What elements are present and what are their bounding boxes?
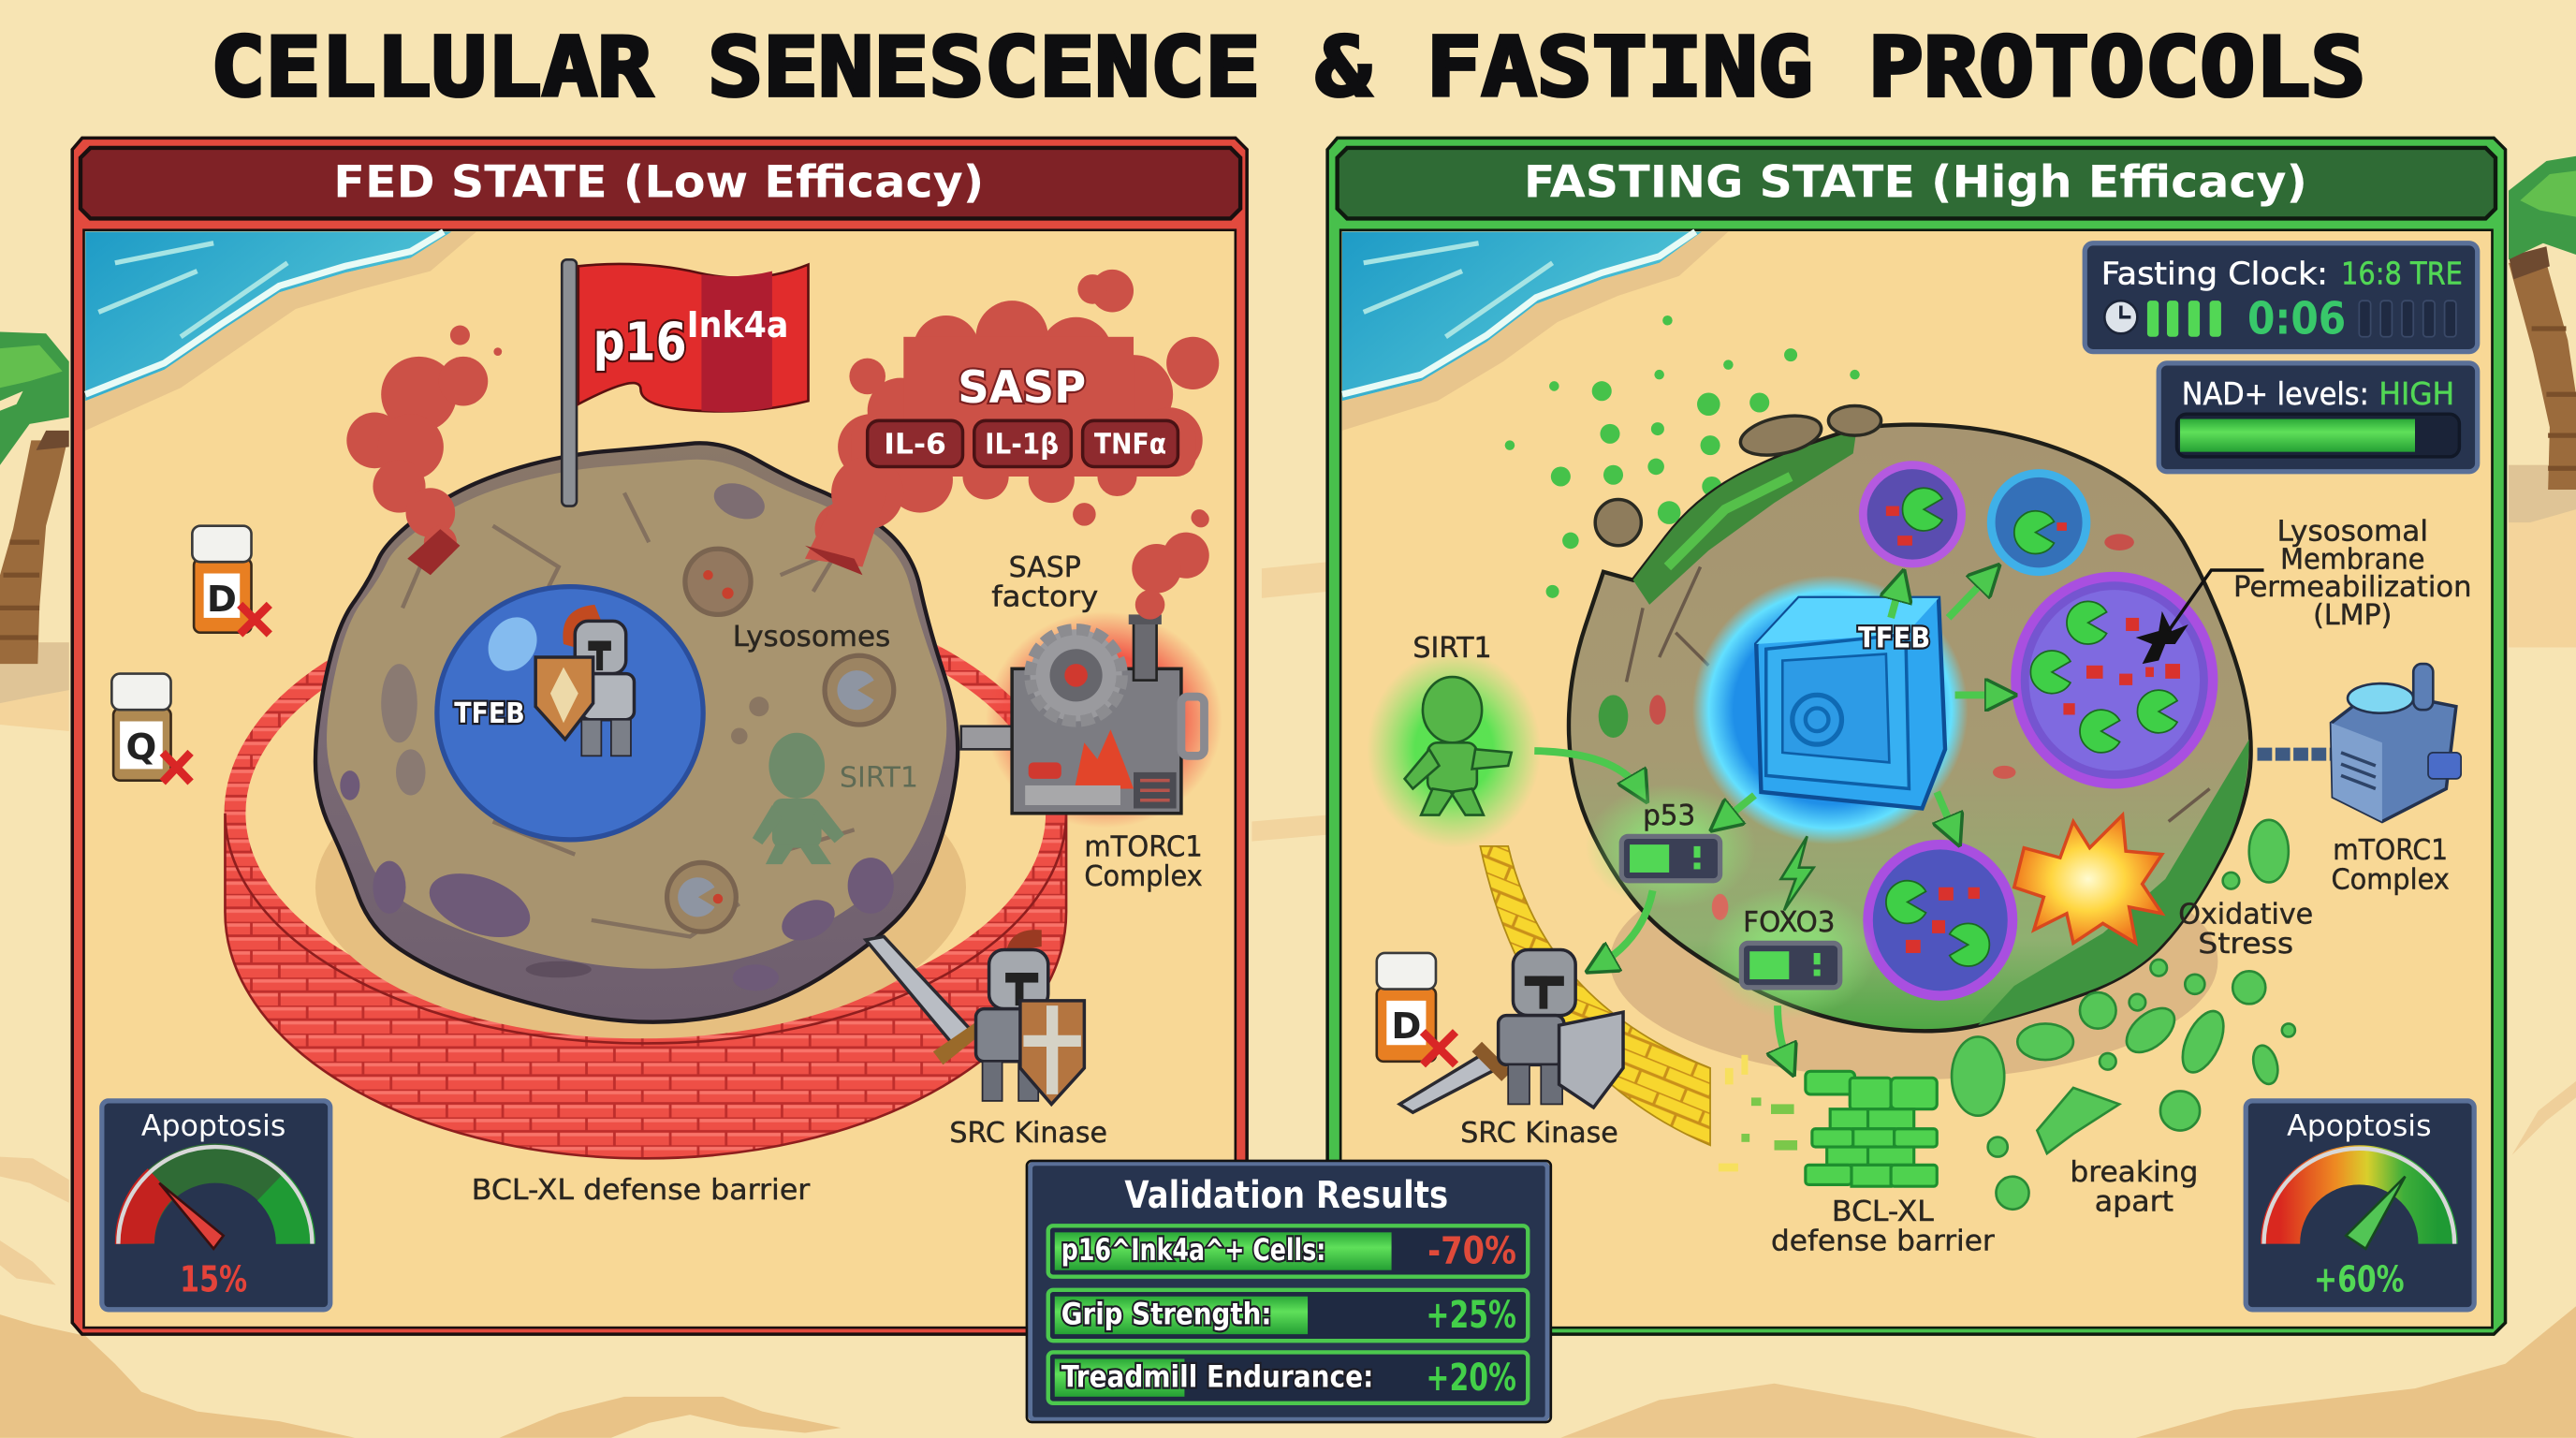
label: p53: p53	[1643, 800, 1695, 832]
figure: dormant SIRT1	[753, 733, 844, 864]
pill bottle: D crossed fasting	[1377, 953, 1456, 1064]
senescent cell	[315, 443, 958, 1022]
label: SIRT1 dim: SIRT1	[840, 762, 918, 795]
row: p16 cells: -70%	[1427, 1229, 1516, 1273]
fasting clock panel: 16:8 TRE	[2341, 256, 2463, 292]
label: mTORC1 Complex: mTORC1	[1084, 830, 1203, 863]
nucleus with TFEB knight	[437, 587, 703, 840]
label: mTORC1 Complex fasting: mTORC1	[2333, 834, 2448, 867]
label: BCL-XL defense barrier fasting: defense barrier	[1771, 1225, 1995, 1258]
header: fasting state: FASTING STATE (High Efficacy)	[1524, 157, 2307, 209]
pill bottle: D crossed	[192, 526, 270, 634]
label: TFEB in fasting: TFEB	[1858, 623, 1930, 655]
pill bottle: Q crossed: Q	[126, 726, 156, 769]
lysosome: dim pac	[825, 655, 894, 725]
green wall fragments	[1952, 820, 2295, 1210]
fasting clock panel	[2085, 243, 2478, 352]
label: breaking apart: breaking	[2070, 1156, 2198, 1189]
breaking apart cell	[1569, 406, 2251, 1031]
row: p16 cells: p16^Ink4a^+ Cells:	[1061, 1234, 1325, 1268]
panel: fasting state	[1327, 138, 2506, 1334]
row: treadmill endurance: Treadmill Endurance:	[1061, 1360, 1373, 1394]
explosion: oxidative stress	[2014, 815, 2162, 943]
mTORC1 SASP factory machine	[961, 511, 1222, 829]
label: BCL-XL defense barrier fasting	[1771, 1196, 1995, 1258]
pill: IL-6: IL-6	[884, 428, 946, 461]
gauge: apoptosis 15%: Apoptosis	[141, 1109, 285, 1143]
label: Lysosomal Membrane Permeabilization (LMP): Membrane	[2280, 543, 2425, 576]
figure: active SIRT1 with glow	[1367, 651, 1541, 848]
scene background: fed state	[84, 230, 1236, 1328]
icon: lightning FOXO3 link	[1781, 836, 1814, 910]
battery: p53	[1621, 836, 1720, 881]
mTORC1 inactive server	[2331, 664, 2461, 822]
knight: SRC kinase fasting	[1399, 949, 1623, 1112]
flag: p16 Ink4a: p16	[593, 312, 687, 373]
NAD+ levels panel: HIGH	[2378, 375, 2454, 412]
lysosome: top purple	[1863, 465, 1962, 564]
battery: FOXO3	[1741, 943, 1840, 988]
label: breaking apart: apart	[2095, 1186, 2174, 1219]
label: Lysosomal Membrane Permeabilization (LMP): Lysosomal	[2277, 515, 2428, 548]
label: BCL-XL defense barrier: BCL-XL defense barrier	[472, 1174, 811, 1207]
BCL-XL defense ring wall	[225, 592, 1066, 1158]
pill: IL-1β	[974, 420, 1071, 466]
lysosome: large with LMP tear	[2016, 577, 2213, 784]
header: fed state	[80, 148, 1240, 218]
label: breaking apart	[2070, 1156, 2198, 1219]
gauge: apoptosis +60%: +60%	[2314, 1259, 2405, 1301]
label: Lysosomal Membrane Permeabilization (LMP): (LMP)	[2313, 599, 2392, 632]
label: Lysosomes: Lysosomes	[733, 621, 890, 653]
gauge: apoptosis 15%: 15%	[180, 1259, 247, 1301]
right palm tree	[2509, 156, 2576, 490]
panel frame: fasting state	[1327, 138, 2506, 1334]
validation heading: Validation Results	[1124, 1173, 1448, 1217]
arrows from nucleus	[1597, 574, 2004, 1064]
label: mTORC1 Complex	[1084, 830, 1203, 893]
scene background: fasting state	[1340, 230, 2492, 1328]
gauge: apoptosis +60%	[2246, 1101, 2474, 1310]
flag: p16 Ink4a: Ink4a	[687, 304, 788, 346]
smoke: left vent	[346, 326, 502, 575]
nucleus with glowing safe	[1692, 575, 1969, 844]
SASP label: SASP	[958, 362, 1086, 414]
knight: TFEB	[535, 605, 634, 756]
label: Oxidative Stress	[2178, 898, 2313, 961]
pill bottle: D crossed: D	[207, 579, 237, 621]
knight: SRC kinase fed	[866, 930, 1084, 1104]
collapsing yellow wall	[1480, 846, 1710, 1145]
SASP cloud	[805, 270, 1219, 575]
label: SASP factory	[991, 551, 1098, 614]
LMP leader line	[2169, 570, 2264, 631]
header: fasting state	[1338, 148, 2496, 218]
row: grip strength: Grip Strength:	[1061, 1299, 1271, 1332]
row: treadmill endurance	[1048, 1352, 1528, 1403]
row: treadmill endurance: +20%	[1426, 1356, 1516, 1400]
label: SASP factory: factory	[991, 581, 1098, 614]
flag: p16 Ink4a	[562, 259, 809, 506]
lysosome: dim with dots	[685, 549, 751, 614]
connector: cell to mTORC1	[2258, 751, 2339, 758]
panel frame: fed state	[72, 138, 1247, 1334]
lysosome: top blue	[1991, 473, 2086, 572]
gauge: apoptosis 15%	[102, 1101, 330, 1310]
pill: TNFα	[1083, 420, 1178, 466]
NAD+ levels panel: NAD+ levels:	[2182, 375, 2369, 412]
fasting clock panel: 0:06	[2247, 293, 2346, 345]
pill: TNFα: TNFα	[1094, 428, 1166, 461]
label: SRC Kinase fed: SRC Kinase	[949, 1117, 1107, 1150]
fasting clock panel: Fasting Clock:	[2101, 256, 2328, 292]
pill bottle: Q crossed	[111, 674, 191, 782]
validation results panel	[1027, 1161, 1551, 1422]
label: Lysosomal Membrane Permeabilization (LMP)	[2233, 515, 2472, 632]
title: CELLULAR SENESCENCE & FASTING PROTOCOLS	[211, 20, 2365, 115]
label: SASP factory: SASP	[1009, 551, 1081, 584]
panel: fed state	[72, 138, 1247, 1334]
pill: IL-1β: IL-1β	[985, 428, 1059, 461]
label: mTORC1 Complex fasting	[2331, 834, 2450, 897]
row: grip strength: +25%	[1426, 1293, 1516, 1337]
label: mTORC1 Complex fasting: Complex	[2331, 864, 2450, 897]
NAD+ levels panel	[2159, 363, 2478, 472]
label: BCL-XL defense barrier fasting: BCL-XL	[1832, 1196, 1934, 1228]
pill bottle: D crossed fasting: D	[1391, 1005, 1421, 1048]
pill: IL-6	[868, 420, 962, 466]
lysosome: lower purple	[1868, 844, 2012, 996]
broken green wall	[1806, 1071, 1937, 1186]
label: Oxidative Stress: Oxidative	[2178, 898, 2313, 931]
glow behind p53 and FOXO3	[1586, 784, 1876, 1019]
arrow: SIRT1 to p53	[1534, 751, 1641, 792]
gauge: apoptosis +60%: Apoptosis	[2287, 1109, 2432, 1143]
row: p16 cells	[1048, 1225, 1528, 1277]
header: fed state: FED STATE (Low Efficacy)	[333, 157, 984, 209]
green debris particles	[1505, 315, 1860, 598]
row: grip strength	[1048, 1290, 1528, 1341]
left palm tree	[0, 332, 69, 664]
lysosome: dim pac lower	[667, 862, 736, 932]
label: TFEB: TFEB	[454, 697, 525, 730]
sparks from broken wall	[1719, 1055, 1797, 1171]
label: Oxidative Stress: Stress	[2198, 928, 2293, 961]
label: FOXO3: FOXO3	[1743, 906, 1835, 939]
label: mTORC1 Complex: Complex	[1084, 860, 1203, 893]
label: SIRT1 active: SIRT1	[1412, 632, 1492, 665]
label: Lysosomal Membrane Permeabilization (LMP): Permeabilization	[2233, 571, 2472, 604]
label: SRC Kinase fasting: SRC Kinase	[1460, 1117, 1618, 1150]
